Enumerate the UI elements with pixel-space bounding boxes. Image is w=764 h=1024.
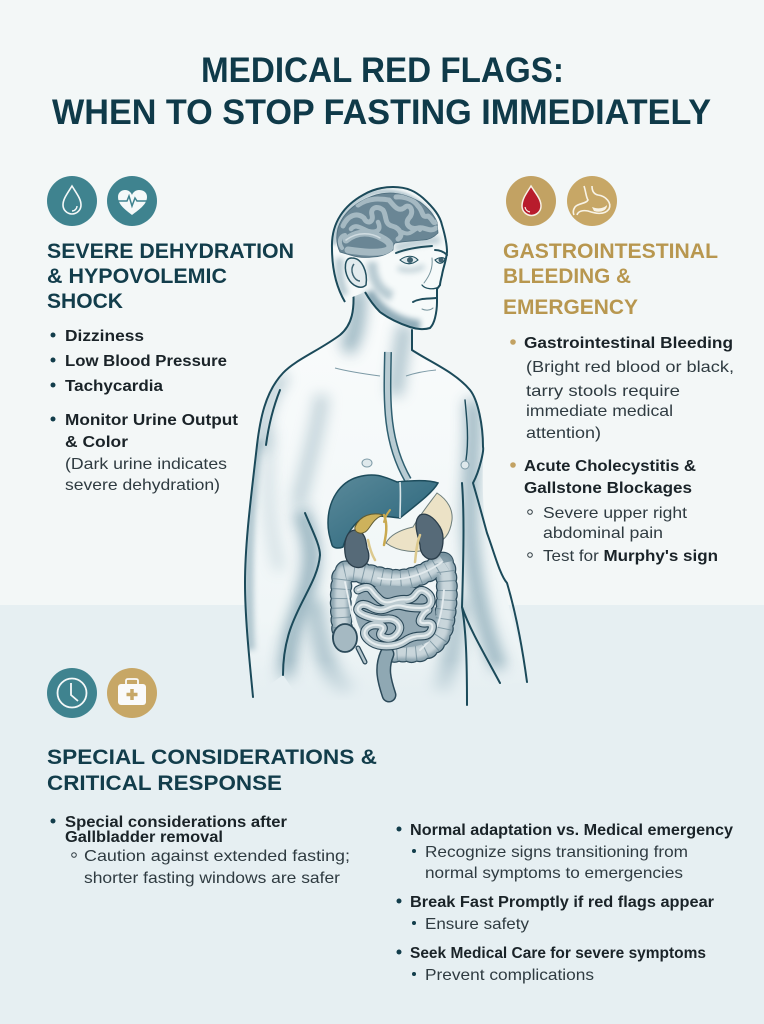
list: critical response: Ensure safety	[425, 916, 529, 933]
ear	[345, 258, 366, 287]
heading: special considerations: CRITICAL RESPONSE	[47, 772, 282, 795]
face features	[396, 246, 447, 310]
liver ligament	[399, 482, 401, 518]
list: dehydration symptoms: & Color	[65, 434, 128, 451]
list: critical response: Prevent complications	[425, 967, 594, 984]
list: gastrointestinal symptoms	[510, 335, 734, 565]
panel: gastrointestinal bleeding	[503, 240, 734, 565]
icon: heart with pulse	[107, 176, 157, 226]
panel: special considerations	[47, 746, 733, 984]
kidneys	[345, 514, 443, 567]
list: gastrointestinal symptoms: tarry stools require	[526, 383, 680, 400]
list: gastrointestinal symptoms: Gastrointestinal Bleeding	[524, 335, 733, 352]
list: dehydration symptoms: Low Blood Pressure	[65, 353, 227, 370]
list: critical response: normal symptoms to emergencies	[425, 865, 683, 882]
heading: special considerations	[47, 746, 377, 795]
heading: dehydration: SHOCK	[47, 290, 123, 313]
list: gallbladder removal: shorter fasting windows are safer	[84, 870, 341, 887]
list: critical response: Break Fast Promptly if red flags appear	[410, 894, 714, 911]
icon: medical kit	[107, 668, 157, 718]
list: critical response: Recognize signs transitioning from	[425, 844, 688, 861]
title: MEDICAL RED FLAGS:	[201, 51, 564, 90]
list: gastrointestinal symptoms: Test for Murphy's sign	[543, 548, 718, 565]
list: dehydration symptoms: Dizziness	[65, 328, 144, 345]
list: dehydration symptoms: Tachycardia	[65, 378, 163, 395]
heading: gastrointestinal: GASTROINTESTINAL	[503, 240, 718, 263]
list: dehydration symptoms: severe dehydration)	[65, 477, 220, 494]
heading: special considerations: SPECIAL CONSIDERATIONS &	[47, 746, 377, 769]
head	[332, 187, 447, 329]
list: gallbladder removal: Gallbladder removal	[65, 829, 223, 846]
panel: severe dehydration	[47, 240, 294, 494]
gallbladder and bile ducts	[355, 510, 420, 562]
esophagus	[387, 352, 408, 480]
heading: dehydration: & HYPOVOLEMIC	[47, 265, 227, 288]
heading: gastrointestinal	[503, 240, 718, 319]
icon: blood drop	[506, 176, 556, 226]
heading: gastrointestinal: EMERGENCY	[503, 296, 638, 319]
list: gastrointestinal symptoms: (Bright red blood or black,	[526, 359, 734, 376]
title	[52, 51, 711, 132]
small intestine	[355, 586, 436, 648]
title: WHEN TO STOP FASTING IMMEDIATELY	[52, 93, 711, 132]
icon: water drop	[47, 176, 97, 226]
list: gallbladder removal: Special considerations after	[65, 814, 287, 831]
list: dehydration symptoms: (Dark urine indicates	[65, 456, 227, 473]
heading: dehydration	[47, 240, 294, 313]
icon: stomach	[567, 176, 617, 226]
heading: gastrointestinal: BLEEDING &	[503, 265, 631, 288]
heading: dehydration: SEVERE DEHYDRATION	[47, 240, 294, 263]
icon: clock	[47, 668, 97, 718]
background bottom band	[0, 605, 764, 1024]
list: gastrointestinal symptoms: Gallstone Blockages	[524, 480, 692, 497]
list: gastrointestinal symptoms: immediate medical	[526, 403, 673, 420]
stomach	[386, 493, 452, 551]
list: gallbladder removal: Caution against extended fasting;	[84, 848, 350, 865]
list: dehydration symptoms: Monitor Urine Output	[65, 412, 239, 429]
list: critical response: Normal adaptation vs. Medical emergency	[410, 822, 733, 839]
illustration: human figure	[240, 187, 535, 705]
list: gastrointestinal symptoms: Acute Cholecystitis &	[524, 458, 696, 475]
list: critical response	[396, 822, 733, 984]
brain	[337, 193, 438, 257]
list: gastrointestinal symptoms: abdominal pain	[543, 525, 663, 542]
colon	[333, 562, 447, 695]
list: gastrointestinal symptoms: Severe upper right	[543, 505, 688, 522]
liver	[328, 475, 438, 548]
list: critical response: Seek Medical Care for severe symptoms	[410, 945, 706, 962]
list: gallbladder removal	[50, 814, 350, 887]
list: dehydration symptoms	[50, 328, 239, 494]
torso and arms	[240, 287, 535, 705]
list: gastrointestinal symptoms: attention)	[526, 425, 601, 442]
